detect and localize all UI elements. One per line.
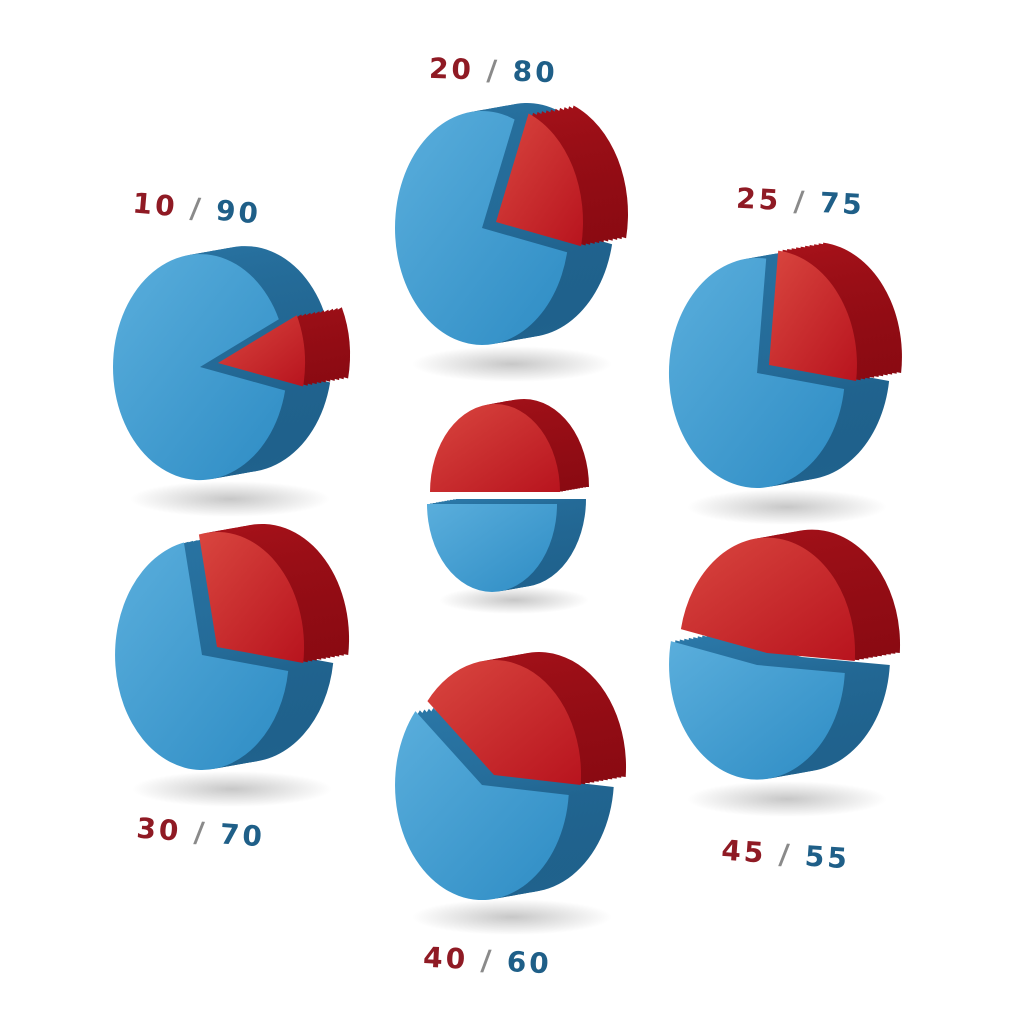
label: 20 / 80: 20 / 80 — [428, 52, 558, 89]
pie: 25/75 — [669, 243, 902, 525]
label: 45 / 55: 45 / 55 — [720, 834, 851, 875]
label: 10 / 90: 10 / 90 — [131, 186, 262, 231]
pie: 45/55 — [669, 530, 900, 817]
label: 40 / 60: 40 / 60 — [422, 941, 553, 980]
pie: 10/90 — [113, 246, 350, 517]
label: 30 / 70: 30 / 70 — [135, 812, 266, 853]
label: 25 / 75: 25 / 75 — [735, 182, 866, 221]
pie: center 50/50 — [427, 399, 589, 614]
pie: 20/80 — [395, 103, 628, 382]
pie: 40/60 — [395, 652, 626, 935]
pie: 30/70 — [115, 524, 349, 807]
